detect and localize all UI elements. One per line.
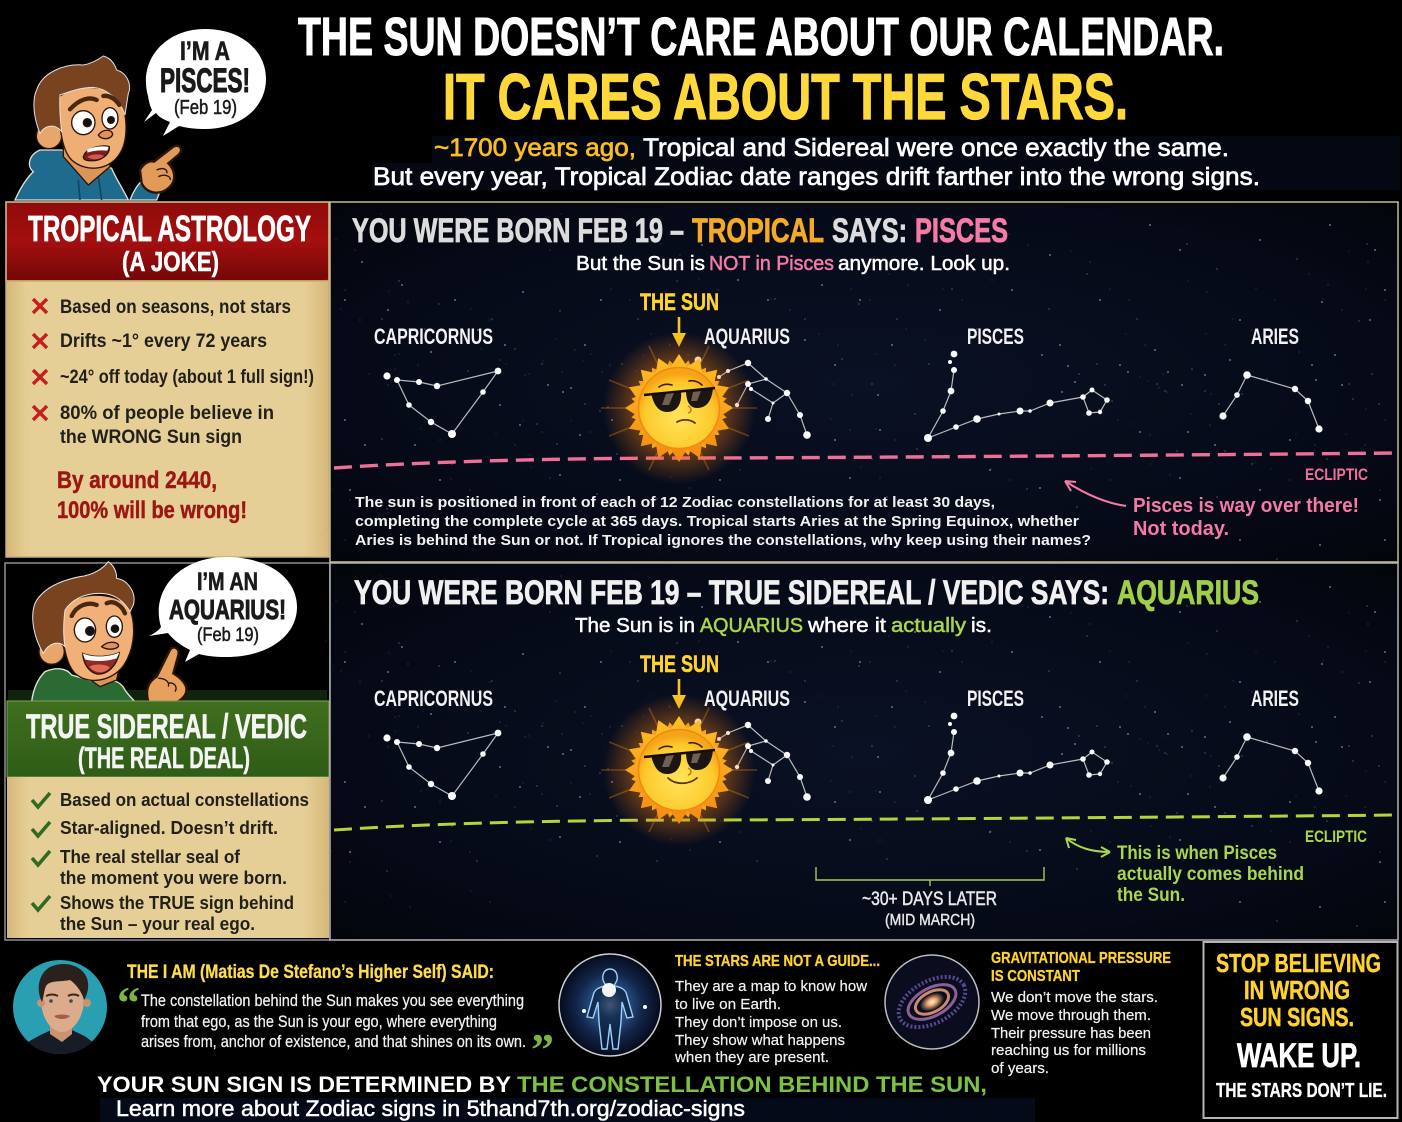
speech bubble: Pisces: PISCES! [160,62,250,100]
sun label and arrow [640,289,719,347]
ecliptic label: ECLIPTIC [1305,465,1368,484]
bracket: 30 days [816,867,1044,929]
tropical heading: PISCES [915,212,1008,250]
pisces callout: actually comes behind [1117,864,1304,885]
tropical heading: YOU WERE BORN FEB 19 – [352,212,684,250]
tropical list text: the WRONG Sun sign [60,427,242,448]
speech bubble: Pisces: I’M A [180,36,230,66]
constellation names: AQUARIUS [704,324,790,349]
tropical heading: SAYS: [832,212,907,250]
speech bubble: Aquarius: AQUARIUS! [169,594,286,625]
sidereal list text: Shows the TRUE sign behind [60,892,294,913]
link band [100,1098,1035,1122]
panel: sidereal sky [326,563,1402,940]
sidereal subheading: The Sun is in [575,615,695,637]
sidereal header: TRUE SIDEREAL / VEDIC [26,708,307,746]
callout: wake up: SUN SIGNS. [1240,1002,1354,1032]
gravitational pressure text [991,950,1171,1077]
subtitle dark band [372,136,1400,190]
sidereal subheading: where it [807,615,886,637]
tropical warning: By around 2440, [57,467,217,494]
sidereal list text [60,789,309,934]
tropical header: (A JOKE) [122,246,219,277]
sidereal list text: Based on actual constellations [60,789,309,810]
constellation names: CAPRICORNUS [374,686,493,711]
speech bubble: Pisces: (Feb 19) [174,97,237,119]
tropical list text: Based on seasons, not stars [60,297,291,318]
sun label and arrow [640,651,719,709]
constellation names: CAPRICORNUS [374,324,493,349]
sidereal heading: YOU WERE BORN FEB 19 – TRUE SIDEREAL / VEDIC SAYS: [354,574,1109,612]
pisces callout: the Sun. [1117,885,1185,906]
tropical heading [352,212,1008,250]
explanation text: completing the complete cycle at 365 days. Tropical starts Aries at the Spring Equinox, whether [355,513,1079,530]
sunglasses sun [601,694,757,846]
opening quote mark: “ [117,977,140,1028]
tropical heading: TROPICAL [692,212,824,250]
callout: wake up [1204,942,1398,1118]
pisces callout [1133,495,1359,540]
tropical header [6,202,329,281]
portrait: Matias De Stefano [13,960,107,1054]
bracket: 30 days: (MID MARCH) [885,912,975,929]
tropical list text: ~24° off today (about 1 full sign!) [60,367,314,388]
check icons [32,793,50,910]
explanation text: The sun is positioned in front of each of 12 Zodiac constellations for at least 30 days, [355,494,995,511]
speech bubble: Aquarius [149,557,297,662]
callout: wake up: WAKE UP. [1237,1037,1361,1075]
gravitational pressure text: We don’t move the stars. [991,989,1158,1006]
subtitle: ~1700 years ago, [434,134,636,162]
constellations [383,713,1323,804]
stars guide text: They show what happens [675,1032,845,1049]
sidereal list panel [7,777,329,938]
constellation names: PISCES [967,686,1024,711]
title [298,7,1224,133]
gravitational pressure text: IS CONSTANT [991,968,1080,985]
bracket: 30 days: ~30+ DAYS LATER [862,889,997,910]
tropical warning [57,467,247,524]
constellations [383,351,1323,442]
stars guide text: They are a map to know how [675,978,867,995]
pisces callout [1117,843,1304,906]
quote block: THE I AM (Matias De Stefano’s Higher Self) SAID: [127,962,494,983]
stars guide text [674,953,880,1066]
subtitle [373,134,1260,191]
constellation names [374,686,1299,711]
panel: sidereal left column [5,557,330,940]
explanation text [355,494,1091,549]
quote text: arises from, anchor of existence, and that shines on its own. [141,1032,526,1051]
gravitational pressure text: of years. [991,1060,1049,1077]
tropical list text: Drifts ~1° every 72 years [60,331,267,352]
callout: wake up: IN WRONG [1244,975,1350,1005]
tropical subheading: But the Sun is [576,253,705,275]
tropical subheading: anymore. Look up. [838,253,1010,275]
sidereal subheading: actually [891,615,966,637]
quote text: from that ego, as the Sun is your ego, where everything [141,1012,497,1031]
sun label and arrow: THE SUN [640,289,719,316]
stars guide text: when they are present. [674,1049,829,1066]
bottom statement: THE CONSTELLATION BEHIND THE SUN, [517,1072,987,1097]
gravitational pressure text: GRAVITATIONAL PRESSURE [991,950,1171,967]
sidereal list text: the Sun – your real ego. [60,913,255,934]
tropical list panel [6,281,329,557]
ecliptic line [334,453,1398,468]
constellation names: AQUARIUS [704,686,790,711]
pisces callout: This is when Pisces [1117,843,1277,864]
tropical list text [60,297,314,448]
tropical subheading: NOT in Pisces [709,253,834,275]
sidereal list text: The real stellar seal of [60,846,241,867]
character: worried man [15,56,181,200]
quote block [117,962,554,1075]
speech bubble: Aquarius: (Feb 19) [197,625,259,646]
subtitle: Tropical and Sidereal were once exactly the same. [643,134,1229,162]
sidereal header: (THE REAL DEAL) [78,742,250,775]
sidereal subheading [575,615,992,637]
panel: tropical astrology [6,202,329,557]
cross icons [33,299,47,420]
tropical subheading [576,253,1010,275]
constellation names: ARIES [1251,686,1299,711]
constellation names: ARIES [1251,324,1299,349]
closing quote mark: ” [531,1024,554,1075]
pisces callout: Not today. [1133,518,1229,540]
arrow: pisces behind sun [1066,838,1110,857]
sidereal subheading: is. [971,615,992,637]
star field [326,214,1402,564]
gravitational pressure text: Their pressure has been [991,1025,1151,1042]
pisces callout: Pisces is way over there! [1133,495,1359,517]
tropical list text: 80% of people believe in [60,403,274,424]
sidereal list text: the moment you were born. [60,867,287,888]
green glow [8,690,327,701]
bottom statement: YOUR SUN SIGN IS DETERMINED BY [97,1072,511,1097]
sunglasses sun [601,332,757,484]
character: happy man [32,562,186,702]
stars guide text: They don’t impose on us. [675,1014,842,1031]
stars guide text: THE STARS ARE NOT A GUIDE... [675,953,880,970]
sidereal subheading: AQUARIUS [700,615,803,637]
gravitational pressure text: reaching us for millions [991,1042,1146,1059]
bottom statement [97,1072,987,1121]
panel: tropical sky [326,202,1402,564]
ecliptic line [334,815,1398,830]
tropical warning: 100% will be wrong! [57,497,247,524]
bottom statement: Learn more about Zodiac signs in 5thand7th.org/zodiac-signs [116,1096,745,1121]
gravitational pressure text: We move through them. [991,1007,1151,1024]
icon: glowing human figure [559,954,661,1056]
tropical header: TROPICAL ASTROLOGY [28,208,311,249]
constellation names [374,324,1299,349]
subtitle: But every year, Tropical Zodiac date ranges drift farther into the wrong signs. [373,163,1260,191]
arrow: pisces direction [1065,481,1126,506]
speech bubble: Pisces [144,29,266,136]
sidereal list text: Star-aligned. Doesn’t drift. [60,817,278,838]
icon: spiral galaxy [885,955,979,1049]
sidereal heading: AQUARIUS [1117,574,1259,612]
speech bubble: Aquarius: I’M AN [197,568,258,596]
quote text: The constellation behind the Sun makes you see everything [141,991,524,1010]
stars guide text: to live on Earth. [675,996,781,1013]
ecliptic label: ECLIPTIC [1305,827,1367,846]
explanation text: Aries is behind the Sun or not. If Tropical ignores the constellations, why keep using their names? [355,532,1091,549]
sidereal header [7,701,329,777]
constellation names: PISCES [967,324,1024,349]
title: IT CARES ABOUT THE STARS. [443,60,1128,133]
star field [326,576,1402,926]
quote text [141,991,526,1051]
sun label and arrow: THE SUN [640,651,719,678]
